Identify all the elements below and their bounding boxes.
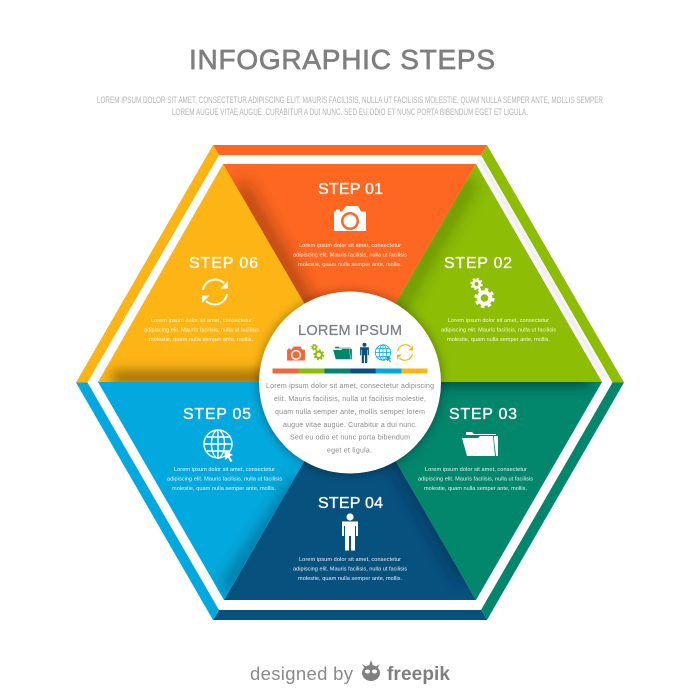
- footer credit: [250, 660, 450, 685]
- text: step 03 body: [418, 467, 533, 492]
- text: step 03 body: molestie, quam nulla semper ante, mollis.: [424, 486, 527, 492]
- text: step 05 body: Lorem ipsum dolor sit amet, consectetur: [174, 467, 275, 473]
- center text block: eget et ligula.: [327, 448, 372, 454]
- footer credit: freepik: [387, 664, 450, 685]
- center text block: augue vitae augue. Curabitur a dui nunc.: [283, 422, 417, 429]
- panel: step 01 orange: [223, 164, 476, 304]
- text: step 03 body: Lorem ipsum dolor sit amet, consectetur: [425, 467, 527, 473]
- center text block: Lorem ipsum dolor sit amet, consectetur adipiscing: [266, 383, 434, 390]
- title: INFOGRAPHIC STEPS: [189, 44, 495, 75]
- center text block: quam nulla semper ante, mollis semper lorem: [275, 409, 425, 416]
- panel: step 03 teal: [396, 382, 602, 600]
- center text block: [266, 383, 434, 454]
- text: step 01 body: adipiscing elit. Mauris facilisis, nulla ut facilisis: [293, 252, 407, 258]
- icon: camera: [334, 206, 366, 231]
- text: step 01 body: Lorem ipsum dolor sit amet, consectetur: [299, 243, 401, 249]
- icon: gears: [471, 279, 493, 307]
- center text block: Sed eu odio et nunc porta bibendum: [290, 434, 410, 442]
- icon row: [287, 343, 413, 363]
- colour bar: [272, 368, 428, 374]
- text: step 04 body: adipiscing elit. Mauris facilisis, nulla ut facilisis: [293, 566, 407, 572]
- heading: step 06: STEP 06: [189, 255, 258, 272]
- icon: freepik mascot: [362, 660, 380, 681]
- heading: step 01: STEP 01: [318, 181, 383, 198]
- icon: globe with cursor: [204, 430, 233, 462]
- subtitle text block: LOREM AUGUE VITAE AUGUE. CURABITUR A DUI NUNC. SED EU ODIO ET NUNC PORTA BIBENDUM EGET ET LIGULA.: [172, 107, 528, 117]
- icon: folder: [462, 432, 498, 456]
- text: step 06 body: adipiscing elit. Mauris facilisis, nulla ut facilisis: [144, 328, 259, 334]
- panel: step 06 yellow: [98, 164, 304, 382]
- text: step 02 body: Lorem ipsum dolor sit amet, consectetur: [448, 318, 549, 324]
- center text block: elit. Mauris facilisis, nulla ut facilisis molestie,: [274, 396, 426, 403]
- text: step 05 body: adipiscing elit. Mauris facilisis, nulla ut facilisis: [167, 476, 282, 482]
- heading: step 03: STEP 03: [449, 406, 517, 423]
- text: step 05 body: [167, 467, 282, 492]
- text: step 01 body: [293, 243, 407, 268]
- heading: step 05: STEP 05: [183, 406, 251, 423]
- subtitle text block: [97, 95, 603, 117]
- panel: step 05 blue: [98, 382, 304, 600]
- hexagon outer frame: [76, 145, 624, 620]
- text: step 05 body: molestie, quam nulla semper ante, mollis.: [172, 486, 276, 492]
- text: step 04 body: Lorem ipsum dolor sit amet, consectetur: [299, 557, 401, 563]
- text: step 02 body: adipiscing elit. Mauris facilisis, nulla ut facilisis: [441, 328, 556, 334]
- panel: step 04 navy: [224, 461, 476, 600]
- text: step 02 body: [441, 318, 556, 343]
- icon: refresh arrows: [202, 280, 228, 304]
- text: step 04 body: molestie, quam nulla semper ante, mollis.: [298, 576, 402, 582]
- icon: person: [342, 513, 358, 550]
- text: step 02 body: molestie, quam nulla semper ante, mollis.: [447, 337, 550, 343]
- text: step 06 body: Lorem ipsum dolor sit amet, consectetur: [151, 318, 252, 324]
- text: step 04 body: [293, 557, 407, 582]
- text: step 03 body: adipiscing elit. Mauris facilisis, nulla ut facilisis: [418, 476, 533, 482]
- text: step 06 body: [144, 318, 259, 343]
- text: step 06 body: molestie, quam nulla semper ante, mollis.: [149, 337, 253, 343]
- panel: step 02 green: [395, 164, 602, 382]
- footer credit: designed by: [250, 663, 354, 684]
- heading: step 04: STEP 04: [318, 495, 383, 512]
- heading: step 02: STEP 02: [444, 255, 512, 272]
- text: step 01 body: molestie, quam nulla semper ante, mollis.: [298, 262, 402, 268]
- heading: lorem ipsum: LOREM IPSUM: [298, 323, 402, 339]
- center circle panel: [258, 291, 442, 475]
